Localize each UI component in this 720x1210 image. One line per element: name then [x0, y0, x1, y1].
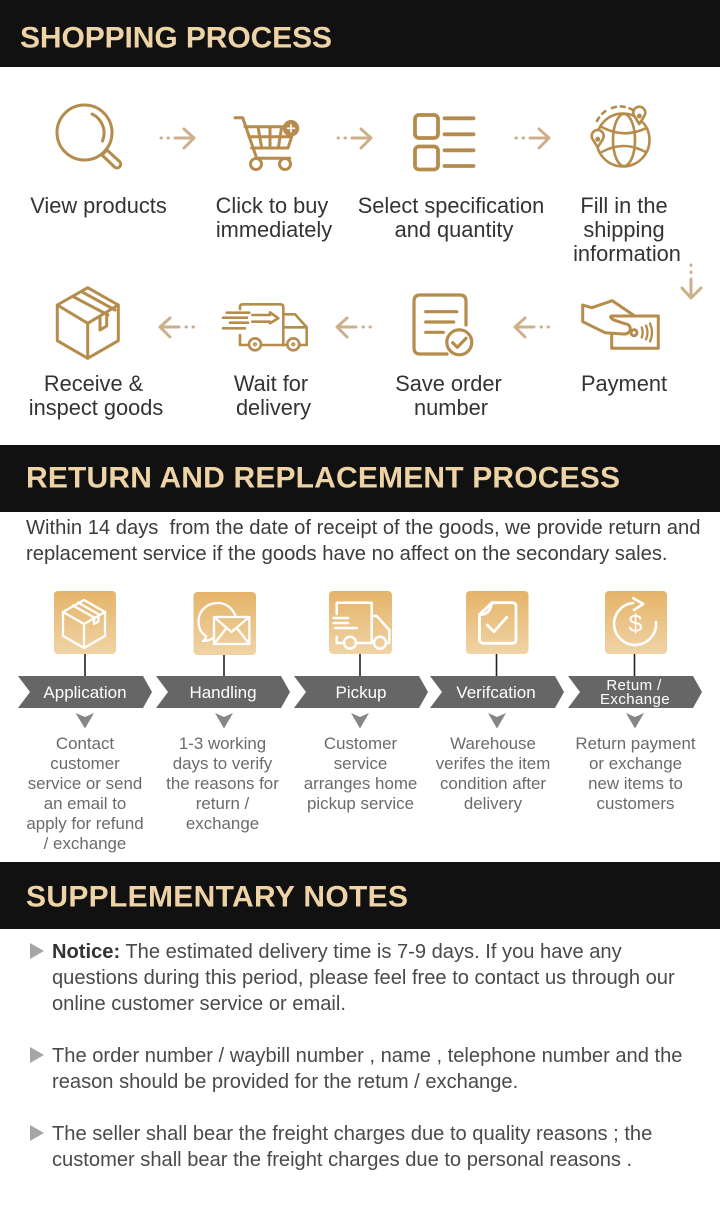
icon: message tile [194, 592, 256, 655]
description: application: / exchange [44, 834, 126, 853]
marker triangle [351, 713, 369, 728]
heading bar: return process [0, 445, 720, 512]
marker triangle [488, 713, 506, 728]
connector [359, 654, 361, 676]
note: freight charges [30, 1123, 652, 1171]
label: click to buy: immediately [216, 217, 332, 242]
label: fill in shipping: shipping [583, 217, 665, 242]
heading bar: return process: RETURN AND REPLACEMENT PROCESS [26, 462, 620, 494]
note: freight charges: The seller shall bear the freight charges due to quality reasons ; the [52, 1123, 652, 1145]
description: application: Contact [56, 734, 114, 753]
arrow [161, 129, 194, 148]
label: select specification: Select specification [358, 193, 544, 218]
description: application: customer [50, 754, 120, 773]
description: handling: days to verify [173, 754, 273, 773]
icon: refund tile [605, 591, 667, 654]
panel: supplementary notes [0, 862, 720, 1171]
label: wait for delivery: Wait for [234, 371, 308, 396]
label: click to buy: Click to buy [216, 193, 328, 218]
step: application [18, 591, 152, 853]
heading bar: shopping process: SHOPPING PROCESS [20, 22, 332, 54]
intro text: replacement service if the goods have no affect on the secondary sales. [26, 543, 668, 565]
chevron label: verification: Verifcation [456, 683, 536, 702]
description: application: apply for refund [26, 814, 144, 833]
step: handling [156, 592, 290, 833]
description: handling: 1-3 working [179, 734, 266, 753]
icon: delivery truck [223, 304, 307, 350]
description: return or exchange: new items to [588, 774, 683, 793]
label: select specification: and quantity [395, 217, 513, 242]
description: return or exchange: or exchange [589, 754, 682, 773]
icon: order with check [414, 295, 472, 355]
marker triangle [215, 713, 233, 728]
description: pickup: Customer [324, 734, 397, 753]
label: save order: Save order [395, 371, 502, 396]
icon: cart [235, 118, 298, 170]
chevron: verification [430, 676, 564, 708]
description: application: an email to [44, 794, 126, 813]
icon: refund tile: $ [629, 610, 643, 638]
label: save order: number [414, 395, 488, 420]
arrow [515, 318, 548, 337]
icon: magnifier [57, 105, 121, 168]
marker triangle [626, 713, 644, 728]
description: handling: the reasons for [166, 774, 279, 793]
heading bar: supplementary notes: SUPPLEMENTARY NOTES [26, 880, 408, 914]
step: pickup [294, 591, 428, 813]
description: application: service or send [28, 774, 142, 793]
step: return or exchange [568, 591, 702, 813]
connector [84, 654, 86, 676]
arrow [516, 129, 549, 148]
chevron: application [18, 676, 152, 708]
chevron label: application: Application [43, 683, 127, 702]
description: verification: delivery [464, 794, 523, 813]
description: pickup: service [334, 754, 387, 773]
chevron label: return or exchange: Exchange [600, 691, 670, 708]
label: fill in shipping: information [573, 241, 681, 266]
note: delivery time: Notice: The estimated delivery time is 7-9 days. If you have any [52, 941, 622, 963]
chevron label: pickup: Pickup [335, 683, 387, 702]
note: freight charges: customer shall bear the freight charges due to personal reasons . [52, 1149, 632, 1171]
intro text: Within 14 days from the date of receipt of the goods, we provide return and [26, 517, 700, 539]
label: fill in shipping: Fill in the [580, 193, 668, 218]
arrow: down [682, 265, 701, 298]
note: order number: The order number / waybill number , name , telephone number and the [52, 1045, 682, 1067]
connector [223, 655, 225, 676]
chevron label: return or exchange: Retum / [606, 677, 662, 694]
label: payment: Payment [581, 371, 667, 396]
panel: return and replacement process [0, 445, 720, 853]
chevron: return or exchange [568, 676, 702, 708]
note: delivery time: questions during this period, please feel free to contact us through our [52, 967, 675, 989]
marker triangle [76, 713, 94, 728]
label: receive and inspect: Receive & [44, 371, 143, 396]
icon: package [57, 288, 118, 358]
chevron: pickup [294, 676, 428, 708]
description: pickup: arranges home [304, 774, 417, 793]
description: handling: exchange [186, 814, 259, 833]
icon: package tile [54, 591, 116, 654]
chevron: handling [156, 676, 290, 708]
icon: globe with pins [592, 106, 650, 166]
label: receive and inspect: inspect goods [29, 395, 163, 420]
icon: specification list [415, 115, 474, 170]
icon: truck tile [329, 591, 392, 654]
label: wait for delivery: delivery [236, 395, 311, 420]
note: delivery time [30, 941, 675, 1015]
description: return or exchange: customers [597, 794, 674, 813]
note: delivery time: online customer service or email. [52, 993, 346, 1015]
step: verification [430, 591, 564, 813]
heading bar: shopping process [0, 0, 720, 67]
description: return or exchange: Return payment [575, 734, 696, 753]
arrow [337, 318, 370, 337]
chevron label: handling: Handling [189, 683, 257, 702]
icon: hand with payment card [583, 301, 658, 348]
description: handling: return / [196, 794, 250, 813]
label: view products: View products [30, 193, 167, 218]
panel: shopping process [0, 0, 720, 420]
heading bar: supplementary notes [0, 862, 720, 929]
description: pickup: pickup service [307, 794, 414, 813]
connector [634, 654, 636, 676]
description: verification: verifes the item [436, 754, 550, 773]
icon: document check tile [466, 591, 528, 654]
description: verification: condition after [440, 774, 546, 793]
connector [496, 654, 498, 676]
description: verification: Warehouse [450, 734, 536, 753]
arrow [338, 129, 371, 148]
note: order number: reason should be provided for the retum / exchange. [52, 1071, 518, 1093]
arrow [160, 318, 194, 337]
note: order number [30, 1045, 682, 1093]
